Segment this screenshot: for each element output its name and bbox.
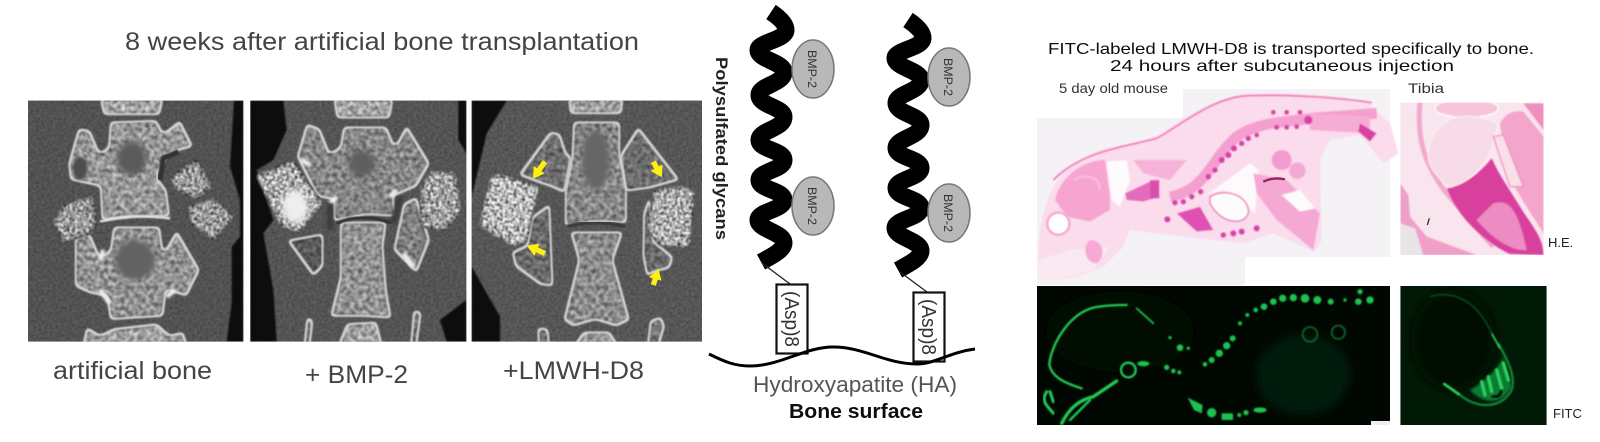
heading: polysulfated glycans: Polysulfated glycans bbox=[712, 57, 731, 240]
scale bar bbox=[1371, 421, 1390, 425]
label: bone surface: Bone surface bbox=[789, 401, 923, 423]
diagram: right glycan chain bbox=[895, 20, 970, 362]
panel: CT artificial bone bbox=[28, 98, 243, 348]
icon: left coil bbox=[758, 12, 786, 262]
diagram: left glycan chain bbox=[758, 12, 834, 354]
icon: BMP-2 lower right bbox=[928, 184, 970, 242]
icon: yellow arrows bbox=[527, 162, 662, 285]
title: CT experiment: 8 weeks after artificial bone transplantation bbox=[125, 28, 639, 56]
box: Asp8 left bbox=[776, 284, 808, 354]
icon: BMP-2 lower: BMP-2 bbox=[805, 187, 817, 225]
box: Asp8 right bbox=[914, 292, 944, 362]
panel: CT plus BMP-2 bbox=[250, 98, 466, 348]
label: 5 day old mouse: 5 day old mouse bbox=[1059, 81, 1168, 96]
heading: FITC transport: FITC-labeled LMWH-D8 is transported specifically to bone. bbox=[1048, 41, 1534, 58]
label: FITC: FITC bbox=[1553, 406, 1582, 421]
box: Asp8 right: (Asp)8 bbox=[917, 299, 939, 355]
icon: BMP-2 upper bbox=[792, 40, 834, 98]
panel: FITC tibia bbox=[1400, 286, 1547, 425]
heading: FITC transport bbox=[1048, 41, 1534, 75]
label: artificial bone: artificial bone bbox=[53, 357, 212, 385]
icon: BMP-2 upper right: BMP-2 bbox=[941, 58, 953, 96]
icon: BMP-2 upper right bbox=[928, 48, 970, 106]
label: plus LMWH-D8: +LMWH-D8 bbox=[503, 357, 644, 385]
icon: right coil bbox=[895, 20, 923, 270]
icon: BMP-2 lower right: BMP-2 bbox=[941, 194, 953, 232]
label: plus BMP-2: + BMP-2 bbox=[305, 361, 408, 389]
label: Tibia: Tibia bbox=[1408, 81, 1445, 96]
box: Asp8 left: (Asp)8 bbox=[780, 291, 802, 347]
icon: BMP-2 lower bbox=[792, 177, 834, 235]
heading: FITC transport: 24 hours after subcutaneous injection bbox=[1110, 58, 1454, 75]
panel: FITC whole mouse bbox=[1037, 286, 1390, 425]
label: H.E.: H.E. bbox=[1548, 235, 1573, 250]
panel: CT plus LMWH-D8 bbox=[472, 98, 702, 348]
panel: HE tibia bbox=[1400, 99, 1544, 255]
bone surface line bbox=[709, 347, 975, 366]
label: hydroxyapatite: Hydroxyapatite (HA) bbox=[753, 372, 957, 397]
panel: HE whole mouse bbox=[1037, 89, 1398, 285]
icon: BMP-2 upper: BMP-2 bbox=[805, 50, 817, 88]
